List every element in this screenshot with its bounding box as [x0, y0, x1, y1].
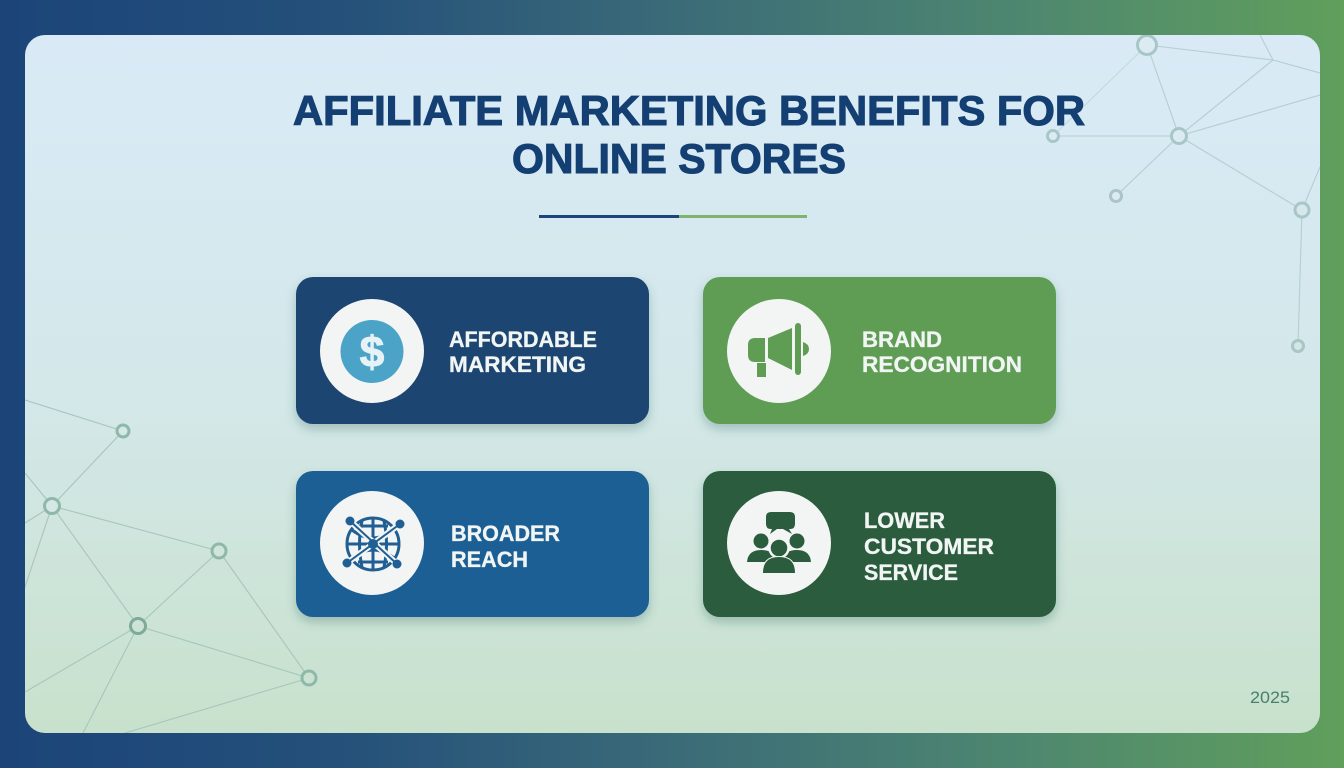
- network decoration: bottom left: [25, 400, 316, 733]
- icon: globe network: [342, 516, 404, 570]
- label: lower customer service: LOWER: [864, 508, 945, 533]
- network decoration: top right: [1048, 35, 1320, 352]
- year label: 2025: [1250, 689, 1290, 707]
- label: broader reach: REACH: [451, 547, 528, 572]
- label: affordable marketing: [449, 327, 597, 377]
- title: AFFILIATE MARKETING BENEFITS FOR: [293, 87, 1085, 134]
- icon: megaphone: [748, 323, 809, 377]
- icon: dollar coin: $: [360, 328, 384, 377]
- icon: dollar coin: [340, 320, 404, 383]
- label: broader reach: BROADER: [451, 521, 560, 546]
- label: brand recognition: RECOGNITION: [862, 352, 1022, 377]
- label: brand recognition: [862, 327, 1022, 377]
- card: lower customer service: [703, 471, 1056, 617]
- card: affordable marketing: [296, 277, 649, 424]
- label: affordable marketing: MARKETING: [449, 352, 586, 377]
- label: lower customer service: CUSTOMER: [864, 534, 994, 559]
- label: lower customer service: SERVICE: [864, 560, 958, 585]
- icon: customer group with speech bubble: [747, 512, 811, 573]
- title: ONLINE STORES: [512, 135, 846, 182]
- title: [293, 87, 1085, 182]
- card: broader reach: [296, 471, 649, 617]
- label: broader reach: [451, 521, 560, 572]
- title divider: [539, 215, 807, 218]
- label: brand recognition: BRAND: [862, 327, 942, 352]
- label: lower customer service: [864, 508, 994, 585]
- label: affordable marketing: AFFORDABLE: [449, 327, 597, 352]
- card: brand recognition: [703, 277, 1056, 424]
